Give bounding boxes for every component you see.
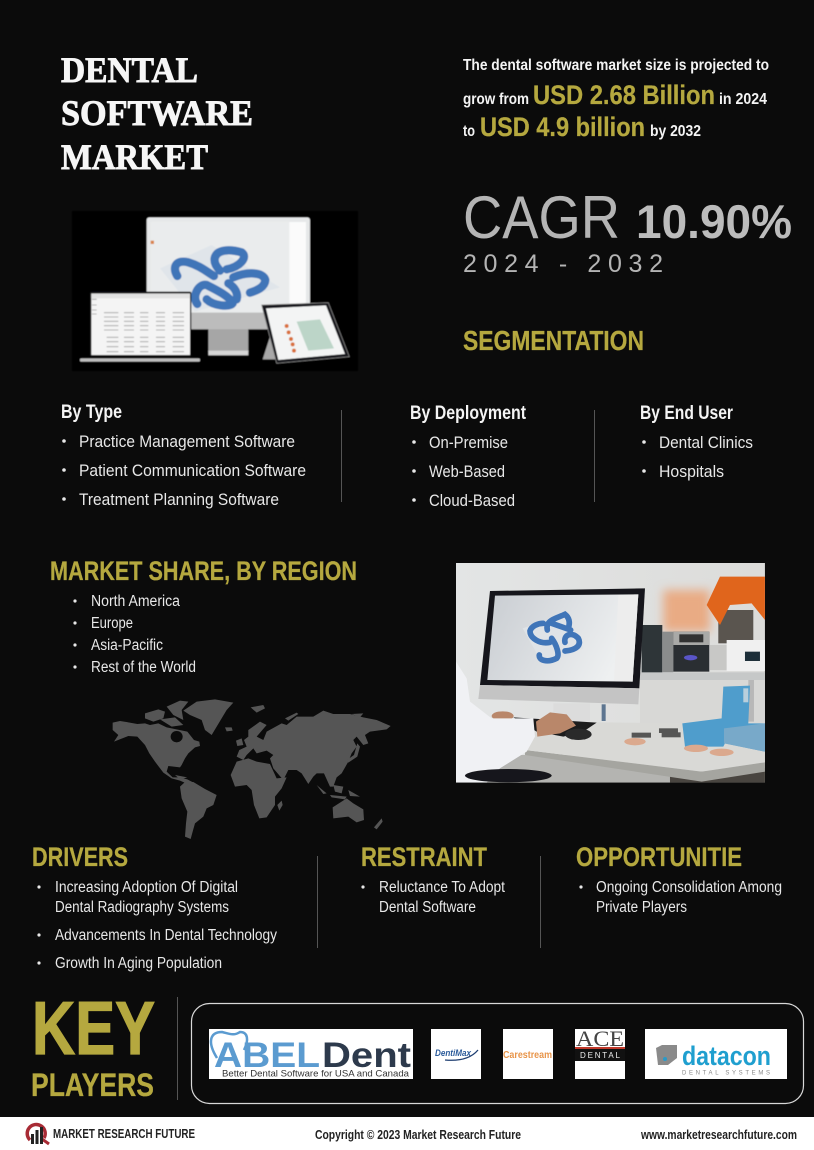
key players heading (31, 986, 155, 1103)
logo: Carestream (503, 1029, 553, 1079)
desktop monitor (478, 588, 645, 722)
image: dental software on devices (72, 211, 358, 371)
laptop (80, 292, 200, 362)
logo: ABELDent: ABEL (214, 1036, 320, 1075)
title: SOFTWARE (61, 93, 253, 133)
footer: MARKET RESEARCH FUTURE (53, 1126, 195, 1141)
logo: ABELDent: Dent (322, 1036, 411, 1075)
title: DENTAL (61, 50, 198, 90)
desk and models (487, 686, 765, 783)
logo: ACE Dental (575, 1026, 625, 1079)
region list (73, 593, 196, 676)
footer: Copyright © 2023 Market Research Future (315, 1127, 521, 1142)
restraint: RESTRAINT (361, 842, 487, 872)
market size statement: The dental software market size is projected to (463, 57, 769, 74)
title: MARKET (61, 137, 208, 177)
key players box (192, 1004, 804, 1104)
region list: Asia-Pacific (91, 637, 163, 654)
restraint: Dental Software (379, 899, 476, 916)
logo: DentiMax (431, 1029, 481, 1079)
market size statement: by 2032 (650, 123, 701, 140)
segment: by deployment: By Deployment (410, 403, 527, 424)
monitor (147, 217, 310, 355)
drivers: Dental Radiography Systems (55, 899, 229, 916)
footer (0, 1117, 814, 1150)
CAGR: CAGR (463, 184, 620, 251)
segment: by deployment: Cloud-Based (429, 491, 515, 510)
drivers: Advancements In Dental Technology (55, 927, 277, 944)
segment: by deployment (410, 403, 527, 510)
region list: Rest of the World (91, 659, 196, 676)
opportunity: Private Players (596, 899, 687, 916)
segment: by end user: Hospitals (659, 462, 724, 481)
restraint (361, 842, 506, 916)
logo: ABELDent (209, 1029, 413, 1079)
segment: by deployment: Web-Based (429, 462, 505, 481)
region list: North America (91, 593, 180, 610)
segment: by end user: By End User (640, 403, 733, 424)
opportunity: Ongoing Consolidation Among (596, 879, 782, 896)
world map (113, 699, 391, 839)
logo: datacon (645, 1029, 787, 1079)
key players heading: PLAYERS (31, 1067, 154, 1103)
logo icon (27, 1124, 49, 1144)
market size statement: in 2024 (719, 91, 767, 108)
market share heading: MARKET SHARE, BY REGION (50, 556, 357, 586)
CAGR: 10.90% (636, 195, 792, 248)
logo: datacon: datacon (682, 1041, 771, 1071)
market size statement (463, 57, 769, 142)
drivers: Increasing Adoption Of Digital (55, 879, 238, 896)
drivers (32, 842, 277, 972)
segment: by type: Patient Communication Software (79, 461, 306, 480)
key players heading: KEY (32, 986, 155, 1070)
market size statement: to (463, 123, 475, 140)
technician arm (456, 662, 576, 783)
region list: Europe (91, 615, 133, 632)
market size statement: USD 4.9 billion (480, 112, 645, 142)
drivers: Growth In Aging Population (55, 955, 222, 972)
segmentation heading: SEGMENTATION (463, 325, 644, 356)
logo: Carestream: Carestream (503, 1049, 552, 1061)
title (61, 50, 253, 177)
segment: by type: Treatment Planning Software (79, 490, 279, 509)
market size statement: USD 2.68 Billion (533, 80, 715, 110)
segment: by type: Practice Management Software (79, 432, 295, 451)
segment: by end user (640, 403, 753, 481)
restraint: Reluctance To Adopt (379, 879, 506, 896)
segment: by end user: Dental Clinics (659, 433, 753, 452)
segment: by type (61, 402, 306, 509)
segment: by deployment: On-Premise (429, 433, 508, 452)
drivers: DRIVERS (32, 842, 128, 872)
logo: ACE Dental: ACE (576, 1026, 624, 1051)
logo: datacon: DENTAL SYSTEMS (682, 1070, 770, 1076)
logo: DentiMax: DentiMax (435, 1048, 472, 1058)
market size statement: grow from (463, 91, 529, 108)
opportunity (576, 842, 782, 916)
CAGR: 2024 - 2032 (463, 250, 663, 278)
logo: ACE Dental: DENTAL (580, 1051, 621, 1060)
opportunity: OPPORTUNITIE (576, 842, 742, 872)
photo: technician using dental software (456, 563, 765, 783)
segment: by type: By Type (61, 402, 122, 423)
logo: ABELDent: Better Dental Software for USA and Canada (222, 1068, 409, 1078)
tablet (262, 303, 349, 363)
shelf and equipment (640, 577, 765, 723)
CAGR (463, 184, 792, 278)
